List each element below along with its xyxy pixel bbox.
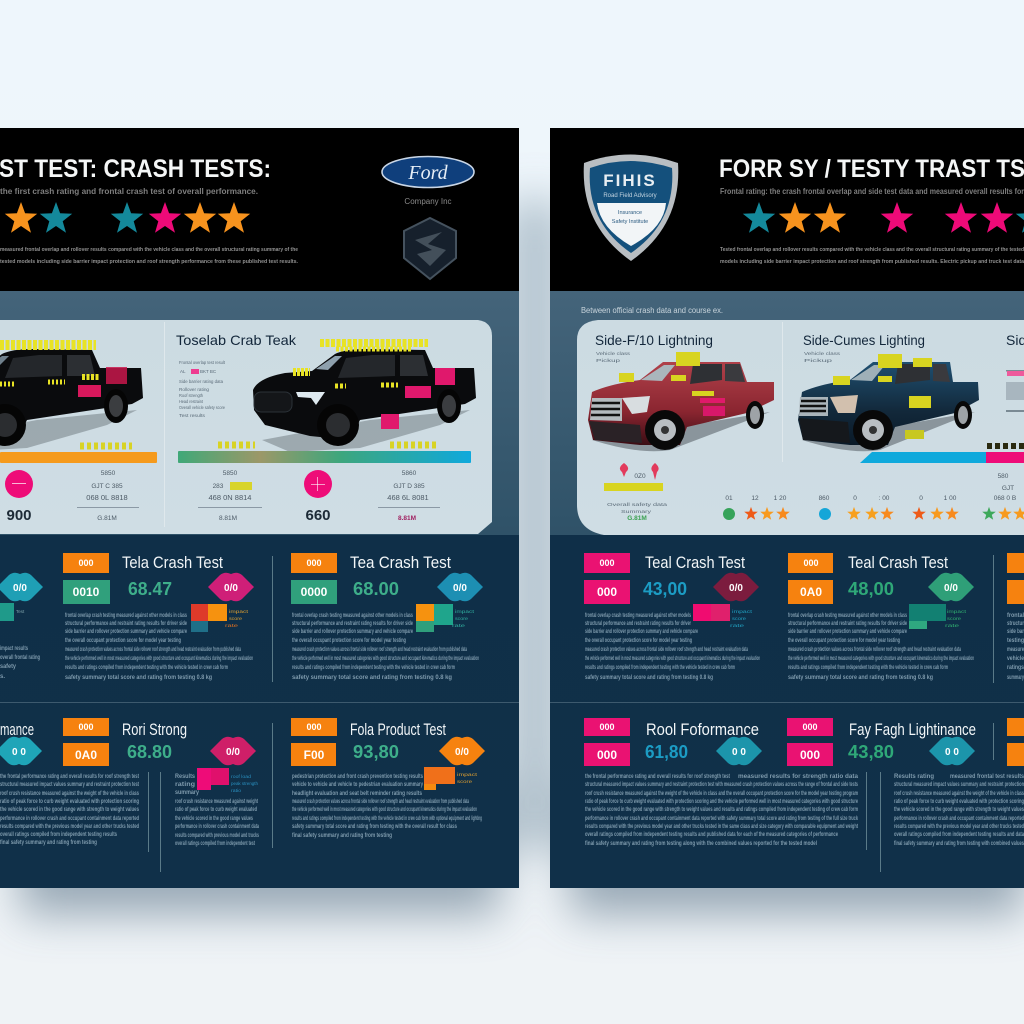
card: Rori Strong: ratio of peak force to curb weight evaluated (175, 807, 257, 813)
card: Teal Crash Test orange: Teal Crash Test (848, 553, 948, 572)
pins and note (604, 463, 668, 522)
card: Teal Crash Test orange: rate (945, 623, 960, 628)
partial card left row 1: 0/0 (13, 583, 27, 594)
partial card left row 1: impact results (0, 646, 28, 652)
card: Fola Product Test: pedestrian protection and front crash prevention testing results (292, 774, 423, 780)
card: Tea Crash Test: measured crash protection values across frontal side rollover roof strength and head restraint evaluation from published data (292, 647, 467, 653)
card: Teal Crash Test pink: rate (730, 623, 745, 628)
card: Tea Crash Test: 0000 (301, 585, 328, 599)
stat column 1 (77, 470, 139, 522)
card: Rool Foformance: roof crush resistance measured against the weight of the vehicle in class and the overall occupant protection score for the model year testing program (585, 791, 858, 797)
card: Rool Foformance: measured results for strength ratio data (738, 774, 859, 780)
card: Tela Crash Test: 000 (78, 558, 94, 568)
card: Teal Crash Test pink: Teal Crash Test (645, 553, 745, 572)
rating row: 0 (919, 495, 923, 502)
Ford logo (382, 156, 474, 206)
gradient bar multi (178, 451, 471, 463)
card: Teal Crash Test pink: measured crash protection values across frontal side rollover roof strength and head restraint evaluation data (585, 647, 748, 653)
card: Rori Strong: rating (175, 782, 195, 788)
card: Teal Crash Test pink: 000 (597, 585, 617, 599)
card: Tea Crash Test (291, 553, 483, 681)
card: Teal Crash Test pink: side barrier and rollover protection summary and vehicle compare (585, 629, 698, 635)
card: Rool Foformance: 000 (597, 748, 617, 762)
card: Rool Foformance: Rool Foformance (646, 720, 759, 739)
spec list left: Roof strength (179, 393, 203, 398)
stat column 3: GJT D 385 (393, 483, 425, 490)
card: Teal Crash Test orange: 000 (803, 558, 819, 568)
card: Tela Crash Test: frontal overlap crash testing measured against other models in class (65, 613, 187, 619)
pins and note: 0Z0 (634, 473, 646, 480)
card: Tea Crash Test: safety summary total score and rating from testing 0.8 kg (292, 675, 452, 681)
partial card left row 1: safety (0, 664, 17, 670)
pins and note: G.81M (627, 515, 647, 522)
card: Tea Crash Test: the overall occupant protection score for model year testing (292, 638, 406, 644)
card: Rori Strong: 0/0 (226, 747, 240, 758)
partial card left row 2: mance (0, 720, 34, 739)
rating row: 0 (853, 495, 857, 502)
card: Rool Foformance: results compared with the previous model year and other trucks tested in the same class and size category with comparable equipment and weight (585, 824, 858, 830)
card right (577, 320, 1024, 535)
card: Teal Crash Test pink: impact (732, 609, 753, 614)
card: Rori Strong: results compared with previous model and trucks (175, 833, 259, 839)
divider (272, 556, 273, 682)
rating row: : 00 (879, 495, 890, 502)
truck: black pickup 2 (253, 349, 476, 452)
spec list left: Overall vehicle safety score (179, 405, 225, 410)
rating row: 860 (819, 495, 830, 502)
card: Tea Crash Test: rate (452, 623, 466, 628)
card: Rori Strong: 000 (78, 722, 94, 732)
card: Rori Strong: overall ratings compiled from independent test (175, 841, 255, 847)
card: Rori Strong: the vehicle scored in the good range values (175, 816, 253, 822)
description right (720, 247, 1024, 265)
yellow annotations bar (987, 443, 1024, 449)
partial card left row 2 (0, 720, 139, 846)
small note Side F/10: Vehicle class (596, 351, 631, 356)
star rating left (5, 202, 250, 233)
stat column clipped: GJT (1002, 485, 1014, 492)
IIHS shield badge: Safety Institute (612, 219, 648, 225)
card: Tea Crash Test: side barrier and rollover protection summary and vehicle compare (292, 629, 413, 635)
IIHS shield badge (584, 154, 678, 261)
card: Teal Crash Test pink: safety summary total score and rating from testing 0.8 kg (585, 675, 713, 681)
drop shadow under panels (20, 200, 1024, 915)
card: Fay Fagh Lightinance: Results rating (894, 774, 934, 780)
card: Teal Crash Test pink: 000 (599, 558, 615, 568)
card: Tea Crash Test: 000 (306, 558, 322, 568)
truck: red pickup (588, 362, 774, 451)
card: Tela Crash Test: the vehicle performed well in most measured categories with good structure and occupant kinematics during the impact evaluation (65, 656, 253, 662)
card: Teal Crash Test orange (788, 553, 974, 681)
card: Rori Strong: 0A0 (75, 748, 97, 762)
divider card left (164, 322, 165, 527)
card: Rool Foformance: 61,80 (645, 742, 688, 762)
partial card left row 1: Test (16, 609, 25, 614)
header band left (0, 128, 519, 291)
card: Tea Crash Test: 68.00 (353, 579, 399, 599)
card: Teal Crash Test pink: results and ratings compiled from independent testing with the vehicle tested in crew cab form (585, 665, 735, 671)
middle band left (0, 291, 519, 535)
small note Side F/10 (596, 351, 631, 363)
row divider left (0, 702, 519, 703)
card: Fola Product Test: score (457, 779, 473, 784)
yellow annotations truck 2 (218, 343, 455, 445)
IIHS shield badge: Road Field Advisory (603, 193, 657, 199)
small note Side Cumes: Vehicle class (804, 351, 841, 356)
stat column clipped: 068 0 B (994, 495, 1016, 502)
card: Tea Crash Test: the vehicle performed well in most measured categories with good structure and occupant kinematics during the impact evaluation (292, 656, 479, 662)
card: Tea Crash Test: score (455, 616, 469, 621)
title left: ST TEST: CRASH TESTS: (0, 155, 271, 183)
card: Fola Product Test: measured crash protection values across frontal side rollover roof strength and head restraint evaluation from published data (292, 799, 469, 805)
card: Tea Crash Test: results and ratings compiled from independent testing with the vehicle tested in crew cab form (292, 665, 455, 671)
card: Rool Foformance: 0 0 (732, 747, 746, 758)
card: Tea Crash Test: 0/0 (453, 583, 467, 594)
lower band right (550, 535, 1024, 888)
panel: right crash test sheet (550, 128, 1024, 888)
card: Fay Fagh Lightinance: Fay Fagh Lightinance (849, 720, 976, 739)
spec list left: BKT BC (200, 369, 217, 374)
card: Rori Strong: Rori Strong (122, 720, 187, 739)
IIHS shield badge: FIHIS (603, 171, 657, 190)
card: Rool Foformance: overall ratings compiled from independent testing results and published data for each of the measured categories of performance (585, 832, 838, 838)
panel: left crash test sheet (0, 128, 519, 888)
truck: black pickup 1 (0, 349, 143, 452)
card: Rori Strong: peak strength (231, 781, 258, 786)
spec list left: AL (180, 369, 186, 374)
gradient bar cyan pink (860, 452, 1024, 463)
card: Tea Crash Test: frontal overlap crash testing measured against other models in class (292, 613, 413, 619)
stat column clipped: 580 (998, 473, 1009, 480)
partial card left row 2: ratio of peak force to curb weight evaluated with protection scoring (0, 799, 139, 805)
card: Teal Crash Test orange: safety summary total score and rating from testing 0.8 kg (788, 675, 933, 681)
card: Rool Foformance: the frontal performance rating and overall results for roof strength test (585, 774, 730, 780)
partial card left row 1: s. (0, 674, 5, 680)
card: Fay Fagh Lightinance: 43,80 (848, 742, 894, 762)
partial card left row 2: final safety summary and rating from testing (0, 840, 97, 846)
card: Rori Strong: 68.80 (127, 742, 172, 762)
row divider right (550, 702, 1024, 703)
small note Side Cumes (804, 351, 841, 363)
rating row: 12 (751, 495, 759, 502)
partial card left row 2: overall ratings compiled from independent testing results (0, 832, 117, 838)
card: Fola Product Test (291, 718, 485, 839)
card: Tea Crash Test: structural performance and restraint rating results for driver side (292, 621, 413, 627)
lower band left (0, 535, 519, 888)
card title left: Toselab Crab Teak (176, 332, 297, 348)
dividers right (866, 555, 994, 872)
card: Tela Crash Test: measured crash protection values across frontal side rollover roof strength and head restraint evaluation from published data (65, 647, 241, 653)
pins and note: Overall safety data (607, 502, 668, 507)
stat column 1: 5850 (101, 470, 116, 477)
partial card left row 2: performance in rollover crash and occupant containment data reported (0, 816, 139, 822)
card: Rori Strong: roof load (231, 774, 252, 779)
stat column 3 (378, 470, 440, 522)
yellow annotations red truck (619, 352, 725, 416)
card: Rool Foformance: final safety summary and rating from testing along with the combined values reported for the tested model (585, 841, 817, 847)
Ford logo: Company Inc (404, 197, 452, 206)
card: Tela Crash Test: side barrier and rollover protection summary and vehicle compare (65, 629, 187, 635)
pink circle 660 (304, 470, 332, 524)
panel: right crash test sheet: the vehicle performed well in most measured categories with good structure and occupant kinematics during the impact evaluation (585, 656, 760, 662)
card: Teal Crash Test orange: side barrier and rollover protection summary and vehicle compare (788, 629, 907, 635)
stat column 2: 468 0N 8814 (209, 493, 251, 502)
truck: blue pickup (798, 362, 979, 451)
card: Teal Crash Test pink: 43,00 (643, 579, 687, 599)
pink circle 900: 900 (6, 507, 32, 524)
card: Fay Fagh Lightinance: 0 0 (945, 747, 959, 758)
card: Tea Crash Test: impact (455, 609, 475, 614)
card: Tela Crash Test: impact (229, 609, 249, 614)
card: Rool Foformance: the vehicle scored in the good range with strength to weight values and results and ratings compiled from independent testing of crew cab form (585, 807, 858, 813)
card: Fola Product Test: safety summary total score and rating from testing with the overall result for class (292, 824, 457, 830)
rating row: 01 (725, 495, 733, 502)
card: Teal Crash Test pink: score (732, 616, 747, 621)
partial card left row 1 (0, 573, 43, 680)
card: Rori Strong: ratio (231, 788, 242, 793)
card: Tela Crash Test: 0/0 (224, 583, 238, 594)
description left (0, 247, 298, 265)
card: Teal Crash Test pink: structural performance and restraint rating results for driver (585, 621, 691, 627)
card: Fola Product Test: Fola Product Test (350, 720, 446, 739)
card: Tela Crash Test: structural performance and restraint rating results for driver side (65, 621, 187, 627)
card: Teal Crash Test orange: impact (947, 609, 967, 614)
Ford logo: Ford (407, 162, 449, 184)
card: Teal Crash Test orange: the overall occupant protection score for model year testing (788, 638, 900, 644)
small note Side F/10: Pickup (596, 358, 621, 363)
spec list left: Side barrier rating data (179, 379, 223, 384)
stat column 1: GJT C 385 (91, 483, 123, 490)
card: Fola Product Test: results and ratings compiled from independent testing with the vehicle tested in crew cab form with optional equipment and lighting (292, 816, 482, 822)
card: Teal Crash Test pink (584, 553, 760, 681)
subtitle left: the first crash rating and frontal crash test of overall performance. (0, 187, 258, 196)
card: Teal Crash Test pink: frontal overlap crash testing measured against other models (585, 613, 691, 619)
spec list left: Frontal overlap test result (179, 360, 226, 365)
card: Fola Product Test: headlight evaluation and seat belt reminder rating results (292, 791, 423, 797)
stat column 2 (198, 470, 262, 522)
card: Rori Strong: roof crush resistance measured against weight (175, 799, 258, 805)
card: Rori Strong: performance in rollover crash containment data (175, 824, 259, 830)
partial card left row 1: overall frontal rating (0, 655, 40, 661)
card: Rori Strong (63, 718, 259, 847)
stat column 1: 068 0L 8818 (86, 493, 128, 502)
card: Fola Product Test: impact (457, 772, 478, 777)
card: Teal Crash Test pink: 0/0 (729, 583, 743, 594)
card: Fola Product Test: 93,80 (353, 742, 399, 762)
card: Tela Crash Test: 68.47 (128, 579, 172, 599)
card: Fola Product Test: 0/0 (455, 747, 469, 758)
card: Teal Crash Test orange: 48,00 (848, 579, 894, 599)
card: Rool Foformance: ratio of peak force to curb weight evaluated with protection scoring and the vehicle performed well in most measured categories with good structure (585, 799, 858, 805)
card: Fay Fagh Lightinance: 000 (802, 722, 818, 732)
stat column 3: 468 6L 8081 (387, 493, 429, 502)
card: Rori Strong: summary (175, 790, 200, 796)
stat column 3: 5860 (402, 470, 417, 477)
stat column 2: 5850 (223, 470, 238, 477)
card: Rool Foformance (584, 718, 859, 847)
small note Side Cumes: Pickup (804, 358, 833, 363)
partial card left row 2: results compared with the previous model year and other trucks tested (0, 824, 139, 830)
card: Tea Crash Test: Tea Crash Test (350, 553, 451, 572)
card title Side Cumes: Side-Cumes Lighting (803, 332, 925, 348)
card: Teal Crash Test orange: 0/0 (944, 583, 958, 594)
pink circle 660: 660 (305, 507, 331, 524)
card: Rool Foformance: structural measured impact values summary and restraint protection test with measured crash protection values across the range of frontal and side tests (585, 782, 858, 788)
card: Rool Foformance: 000 (599, 722, 615, 732)
card: Fola Product Test: vehicle to vehicle and vehicle to pedestrian evaluation summary (292, 782, 423, 788)
rating row: 1 00 (944, 495, 957, 502)
card: Teal Crash Test orange: score (947, 616, 962, 621)
yellow annotations blue truck (833, 354, 932, 439)
card: Teal Crash Test orange: frontal overlap crash testing measured against other models in class (788, 613, 907, 619)
partial card left row 2: the vehicle scored in the good range with strength to weight values (0, 807, 139, 813)
description left: measured frontal overlap and rollover results compared with the vehicle class and the overall structural rating summary of the (0, 247, 298, 253)
spec list left: Rollover rating (179, 387, 210, 392)
spec list left: Head restraint (179, 399, 204, 404)
pink circle 900 (5, 470, 33, 524)
card: Tela Crash Test: 0010 (73, 585, 100, 599)
card: Fola Product Test: the vehicle performed well in most measured categories with good structure and occupant kinematics during the impact evaluation (292, 807, 477, 813)
star rating right (743, 202, 1024, 233)
partial card left row 2: the frontal performance rating and overall results for roof strength test (0, 774, 139, 780)
partial card left row 2: structural measured impact values summary and restraint protection test (0, 782, 139, 788)
stat column 1: G.81M (97, 515, 117, 522)
rating row (723, 495, 1024, 520)
pins and note: Summary (621, 509, 652, 514)
card: Rori Strong: Results (175, 774, 196, 780)
card title Side F/10: Side-F/10 Lightning (595, 332, 713, 348)
yellow annotations truck 1 (0, 345, 132, 446)
spec list left: Test results (179, 413, 206, 418)
card: Tela Crash Test: rate (225, 623, 239, 628)
card: Fay Fagh Lightinance (787, 718, 1024, 847)
partial card left row 2: 0 0 (12, 747, 26, 758)
card: Fay Fagh Lightinance: 000 (800, 748, 820, 762)
card: Fola Product Test: F00 (304, 748, 325, 762)
card: Tela Crash Test: score (229, 616, 243, 621)
stat column clipped (994, 370, 1024, 502)
card: Fola Product Test: final safety summary and rating from testing (292, 833, 392, 839)
description left: tested models including side barrier impact protection and roof strength performance from these published test results. (0, 259, 298, 265)
rating row: 1 20 (774, 495, 787, 502)
stat column 2: 8.81M (219, 515, 237, 522)
IIHS shield badge: Insurance (618, 210, 642, 216)
header band right (550, 128, 1024, 291)
card left (0, 320, 492, 534)
dividers row 2 (148, 723, 273, 872)
partial card left row 2: roof crush resistance measured against the weight of the vehicle in class (0, 791, 139, 797)
card: Tela Crash Test: results and ratings compiled from independent testing with the vehicle tested in crew cab form (65, 665, 228, 671)
card: Tela Crash Test: safety summary total score and rating from testing 0.8 kg (65, 675, 212, 681)
card: Fola Product Test: 000 (306, 722, 322, 732)
stat column 2: 283 (213, 483, 224, 490)
gradient bar orange (0, 452, 157, 463)
card: Teal Crash Test orange: structural performance and restraint rating results for driver side (788, 621, 907, 627)
spec list left (179, 360, 226, 418)
card: Tela Crash Test: the overall occupant protection score for model year testing (65, 638, 181, 644)
card: Teal Crash Test pink: the overall occupant protection score for model year testing (585, 638, 692, 644)
card: Tela Crash Test (63, 553, 254, 681)
icon: dark shield (404, 218, 456, 279)
middle band right (550, 291, 1024, 535)
card: Tela Crash Test: Tela Crash Test (122, 553, 223, 572)
card: Teal Crash Test orange: 0A0 (800, 585, 822, 599)
clipped cards right edge (1007, 553, 1024, 766)
stat column 3: 8.81M (398, 515, 416, 522)
section heading right: Between official crash data and course ex. (581, 306, 723, 315)
card: Rool Foformance: performance in rollover crash and occupant containment data reported with safety summary total score and rating from testing of the full size truck (585, 816, 858, 822)
card divider right (782, 322, 783, 462)
